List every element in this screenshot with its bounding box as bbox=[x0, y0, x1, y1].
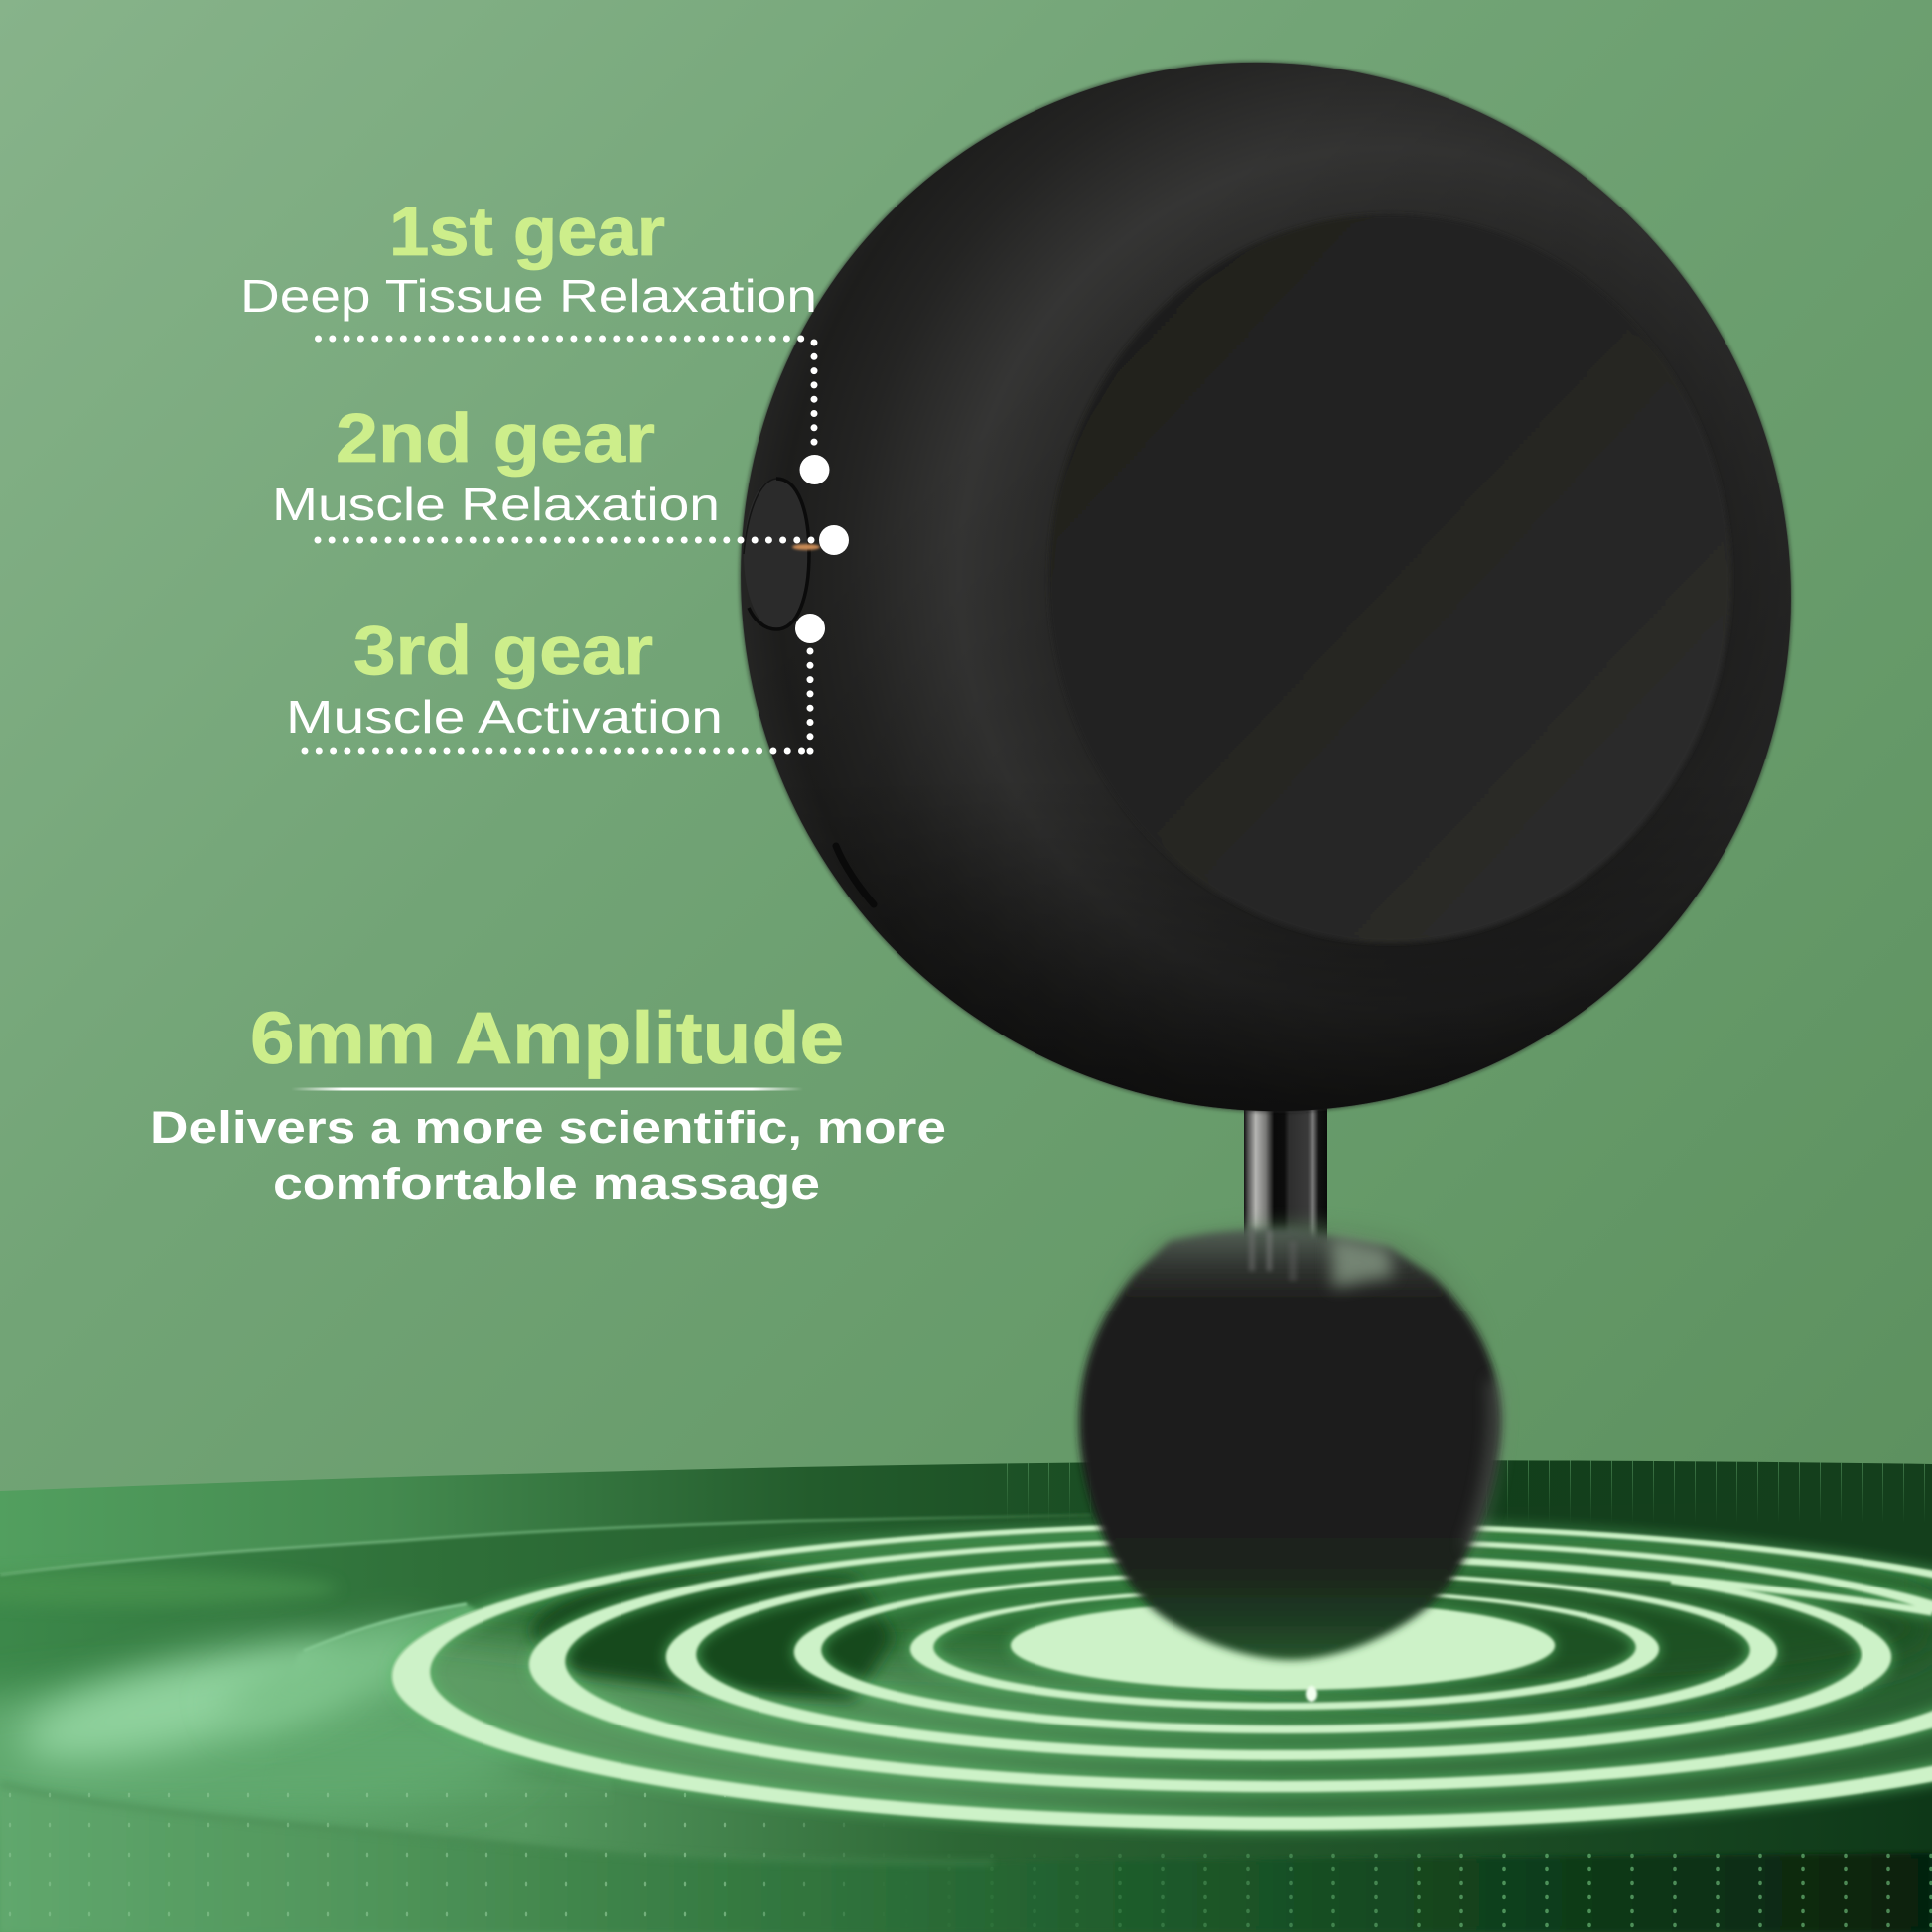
massage gun body sphere bbox=[737, 59, 1795, 1114]
charging port bbox=[836, 846, 874, 904]
label: 1st gear: 1st gear bbox=[389, 193, 665, 270]
dotted leader: 1st gear bbox=[318, 339, 830, 484]
dotted leader: 3rd gear bbox=[305, 614, 825, 752]
label: 3rd gear: 3rd gear bbox=[353, 612, 653, 689]
label: 2nd gear bbox=[272, 399, 720, 530]
green fabric ground with ripples bbox=[0, 1449, 1932, 1932]
description text bbox=[150, 1102, 946, 1209]
description text: comfortable massage bbox=[273, 1159, 820, 1209]
label: 3rd gear bbox=[286, 612, 723, 743]
glowing concentric ripple rings bbox=[392, 1519, 1932, 1830]
label: 2nd gear: 2nd gear bbox=[336, 399, 655, 477]
description text: Delivers a more scientific, more bbox=[150, 1102, 946, 1153]
dotted leader: 2nd gear bbox=[318, 525, 849, 555]
label: 3rd gear: Muscle Activation bbox=[286, 691, 723, 743]
power button bbox=[744, 479, 820, 629]
label: 2nd gear: Muscle Relaxation bbox=[272, 479, 720, 530]
label: 1st gear bbox=[240, 193, 817, 322]
heading: 6mm Amplitude: 6mm Amplitude bbox=[250, 997, 844, 1079]
divider rule bbox=[291, 1088, 803, 1090]
massage head stem bbox=[1244, 1097, 1327, 1246]
label: 1st gear: Deep Tissue Relaxation bbox=[240, 270, 817, 322]
massage ball head with motion blur bbox=[1079, 1222, 1501, 1660]
